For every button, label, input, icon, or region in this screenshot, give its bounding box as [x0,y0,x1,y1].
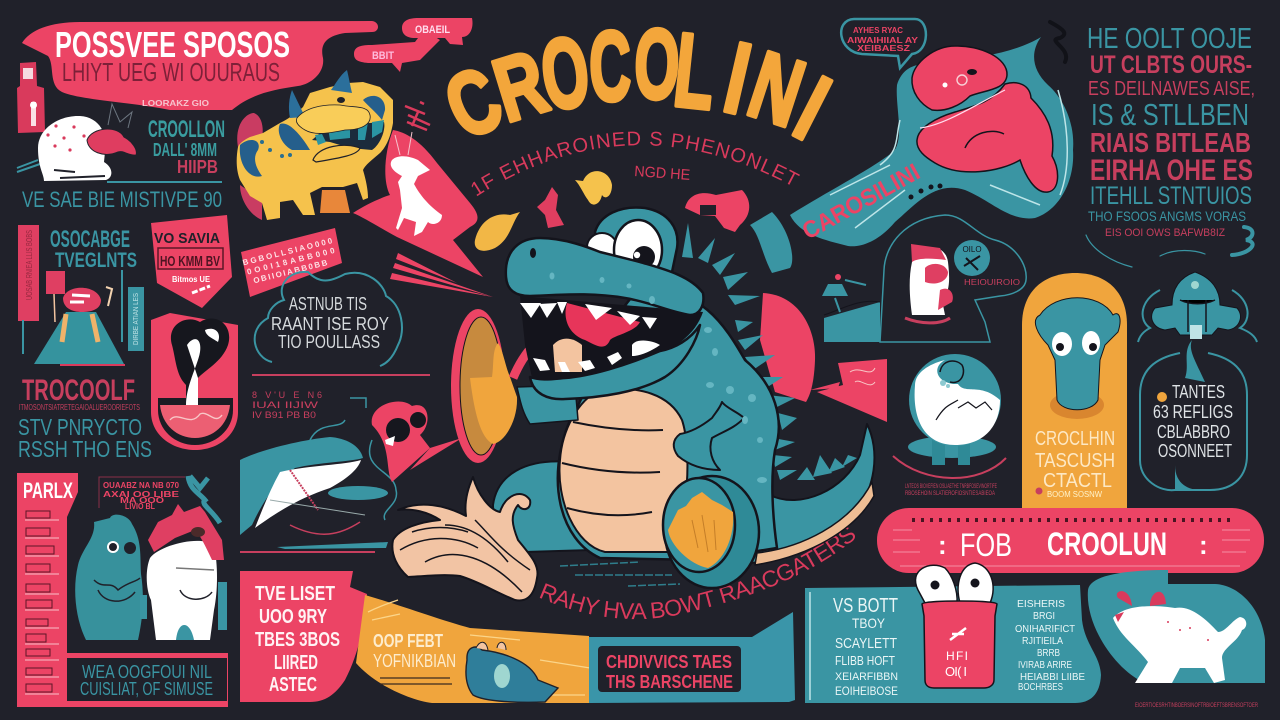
illustration: white bear with pink head [17,104,136,181]
title: crocolini: I [780,57,845,160]
orange character card [1022,273,1127,515]
banner text: : [1199,530,1208,560]
peach swirl [392,477,538,600]
title: crocolini: C [588,12,632,123]
capsule text: TANTES [1172,382,1225,402]
teal-outlined capsule with text [1140,340,1247,490]
illustration: teal shark [240,437,397,553]
pink capsule panel with bowl [151,313,238,450]
blue horns [289,70,352,118]
body [558,290,779,560]
left text: TBOY [852,615,886,631]
left text: SCAYLETT [835,635,897,652]
snout [506,238,703,315]
cloud callout [255,272,402,366]
right text: EISHERIS [1017,599,1065,610]
capsule text: CBLABBRO [1157,422,1230,442]
panel: parlx characters: CUISLIAT, OF SIMUSE [80,679,213,699]
blue patches [240,96,385,177]
left text: FLIBB HOFT [835,653,895,668]
illustration: teal hippo [75,515,143,640]
pink fins behind [237,113,263,220]
tongue stretching [513,327,563,378]
tiny text box: MA OOO [120,496,164,505]
tiny text box: LIVIO BL [125,502,155,511]
right column text block: EIS OOI OWS BAFWB8IZ [1105,227,1225,239]
spikes [682,223,857,480]
title: crocolini: R [482,30,558,141]
right text: BOCHRBES [1018,682,1063,693]
capsule text [1153,382,1233,461]
teal flourish [188,476,220,523]
card text: CTACTL [1043,470,1112,492]
panel: parlx characters [17,473,228,707]
icon: lamp and building [824,302,880,342]
title: crocolini: C [430,47,516,159]
lower jaw [313,145,360,162]
teeth [520,302,660,372]
capsule text: 63 REFLIGS [1153,402,1233,422]
title: crocolini: I [715,21,760,135]
right column text block [1087,23,1255,239]
teal badge [954,240,990,276]
text block: teal heading: OSOCABGE [50,226,130,253]
pink rule and tiny text above shark [252,374,430,440]
banner subheading: LHIYT UEG WI OUURAUS [62,57,280,87]
text block: crocolin teal: HIIPB [177,157,218,177]
card text [1035,428,1115,499]
belly [559,389,687,552]
tail [745,424,874,565]
text block: teal heading [50,226,137,272]
icon: white bear [1113,606,1246,683]
title: crocolini: O [633,9,681,121]
teal screen panel [589,612,795,703]
squiggle icons [1050,22,1253,267]
speech tags at top [354,18,473,72]
cloud text: TIO POULLASS [278,332,380,352]
list rows [26,511,54,692]
pink text panel: TBES 3BOS [255,629,340,651]
curved caption: RAHY HVA BOWT RAACGATERS [540,527,855,620]
pink vertical strip: UOSAB RNIEA LLIS BOBS [25,230,34,300]
left text [833,595,898,698]
body [237,82,393,220]
icon: black and white animal [171,319,229,405]
teal vertical strip [121,270,144,351]
orange ribbon panel: YOFNIKBIAN [373,651,456,671]
eyes [587,233,617,261]
text block: trocoolf: ITMOSONTSIATRETEGAIOALUEROORIEFOTS [19,403,140,412]
right text: BRRB [1037,648,1060,659]
head [296,105,370,133]
right text: HEIABBI LIIBE [1020,672,1085,683]
text line with rule: VE SAE BIE MISTIVPE 90 [22,187,222,212]
pink text panel: UOO 9RY [259,606,327,628]
pink tag with tiny text: BGBOLLSIAO000 [242,236,334,267]
scene: santa in cloud: OILO [962,245,982,254]
speech bubble top right [841,19,926,68]
tiny text box: OUAABZ NA NB 070 [103,481,180,490]
text block: trocoolf [18,374,152,462]
illustration: figure in teal cape [34,271,125,366]
pink text panel: TVE LISET [255,583,335,605]
illustration: white bear with red bandana [140,504,227,640]
text block: trocoolf: TROCOOLF [22,374,135,407]
central crocodile mascot [392,207,874,600]
arm and hand [674,402,744,470]
panel heading: PARLX [23,478,73,503]
pink small pennant [810,359,887,422]
decorative pink marks near title [405,102,430,130]
teal bottom panel with pocket: H F I [946,649,968,663]
speech tags at top: OBAEIL [415,24,450,36]
banner text: : [938,530,947,560]
icon: white ears [915,565,957,603]
right column text block: THO FSOOS ANGMS VORAS [1088,208,1246,224]
food icons [475,171,792,273]
text block: teal heading: TVEGLNTS [55,249,137,272]
banner heading: POSSVEE SPOSOS [55,24,290,65]
pink pennant panel: Bitmos UE [172,275,211,284]
speech tags at top: BBIT [372,50,394,62]
left text: XEIARFIBBN [835,671,898,683]
pink pennant panel: HO KMM BV [160,253,220,270]
banner small caption: LOORAKZ GIO [142,99,209,108]
text block: crocolin teal [148,116,225,177]
text block: crocolin teal: DALL' 8MM [153,140,217,160]
title: crocolini: L [669,12,721,132]
teal face [1035,298,1120,410]
right text: RJITIEILA [1022,636,1063,647]
icon: santa figure [910,247,949,315]
left hand oval [451,309,578,463]
pink banner [877,508,1264,573]
pink pennant panel: VO SAVIA [154,230,220,247]
right text: IVIRAB ARIRE [1018,660,1072,671]
banner text [938,526,1208,563]
teal blob with white bear [1088,570,1265,683]
banner text: FOB [960,527,1012,563]
subtitle: 1F EHHAROINED S PHENONLET [472,132,800,196]
right text: BRGI [1033,611,1055,622]
eye dome [595,207,677,272]
pink text panel: ASTEC [269,674,317,696]
orb tiny text: LNTEOS BIOVEFIEN OSLIAETHE TNRBFOSEVINORTIFE [905,484,997,490]
panel caption: WEA OOGFOUI NIL [82,662,212,682]
cloud text [271,294,389,352]
pink tag with tiny text [241,228,342,297]
capsule text: OSONNEET [1158,441,1232,461]
pink rule and tiny text above shark: 8 V'U E N6 [252,390,322,400]
banner text: CROOLUN [1047,526,1167,562]
teal bottom panel with pocket [805,563,1101,703]
orb illustration: RBOSEHOIN SLATIEROFIOSNTIESABIEOA [905,491,995,497]
ribbon text: CAROSILINI [798,159,925,245]
card text: BOOM SOSNW [1047,490,1102,499]
right text [1015,599,1085,693]
small note under subtitle: NGD HE [634,163,691,184]
ground dashes [560,562,680,586]
card text: TASCUSH [1035,450,1115,472]
teal screen panel: THS BARSCHENE [606,672,733,692]
text block: trocoolf: RSSH THO ENS [18,436,152,462]
speech bubble top right: XEIBAESZ [857,44,910,53]
title: crocolini: O [535,16,596,132]
orange ribbon panel: OOP FEBT [373,631,443,651]
speech bubble top right: AYHES RYAC [853,26,903,35]
chin shadow [1050,391,1104,419]
pink wing behind [760,293,815,402]
icon: blue slug [466,647,558,702]
teal screen panel: CHDIVVICS TAES [606,652,732,672]
teal bottom panel with pocket: OI( I [945,664,967,679]
right text: ONIHARIFICT [1015,624,1075,635]
teal monster icon [1138,272,1257,342]
scene: santa in cloud [822,215,1026,342]
pink pennant panel [151,215,232,308]
pink tag with tiny text: 0O0I18ABB000 [246,246,336,277]
teal vertical strip: DIRBE ATIAN LES [133,293,140,345]
illustration: pink mouse in speech [372,401,462,482]
icon: white dog [391,156,442,236]
teal ribbon with hippo [790,37,1073,246]
nostril [530,248,536,258]
orange ribbon panel [356,595,590,703]
speech bubble top right: AIWAIHIIAL AY [847,36,919,45]
tiny text box [99,477,185,511]
left text: EOIHEIBOSE [835,684,898,698]
left text: VS BOTT [833,595,898,617]
pink vertical strip [18,225,39,354]
tongue [566,303,640,347]
text block: crocolin teal: CROOLLON [148,116,225,143]
mouth [312,122,384,150]
pink speech shape with white dog [353,130,493,297]
left leg [493,461,592,552]
foot [663,476,759,588]
card text: CROCLHIN [1035,428,1115,450]
yellow dinosaur illustration [237,70,393,220]
lower jaw [530,325,700,399]
pink text panel: LIIRED [274,652,318,674]
text block: trocoolf: STV PNRYCTO [18,414,142,440]
pink rule and tiny text above shark: IV B91 PB B0 [252,410,316,420]
pink text panel [240,571,367,702]
icon: pink tower [17,62,45,133]
orange leg [320,190,350,213]
panel: top-left pink banner [22,21,378,110]
scene: santa in cloud: HEIOUIROIO [964,278,1020,287]
spots [550,272,767,483]
cloud text: ASTNUB TIS [289,294,367,314]
icon: pink hippo [912,46,1058,192]
title: crocolini: N [737,32,816,148]
orb illustration [893,354,1006,497]
pink rule and tiny text above shark: IUAI IIJIW [252,400,319,410]
pink tag with tiny text: OBIIOIABB0BB [252,258,329,285]
icon: pink pocket [922,601,997,688]
mouth interior [520,296,703,380]
tiny text box: AXAI OO LIBE [103,490,180,499]
cloud text: RAANT ISE ROY [271,314,389,334]
title: crocolini [430,9,845,160]
